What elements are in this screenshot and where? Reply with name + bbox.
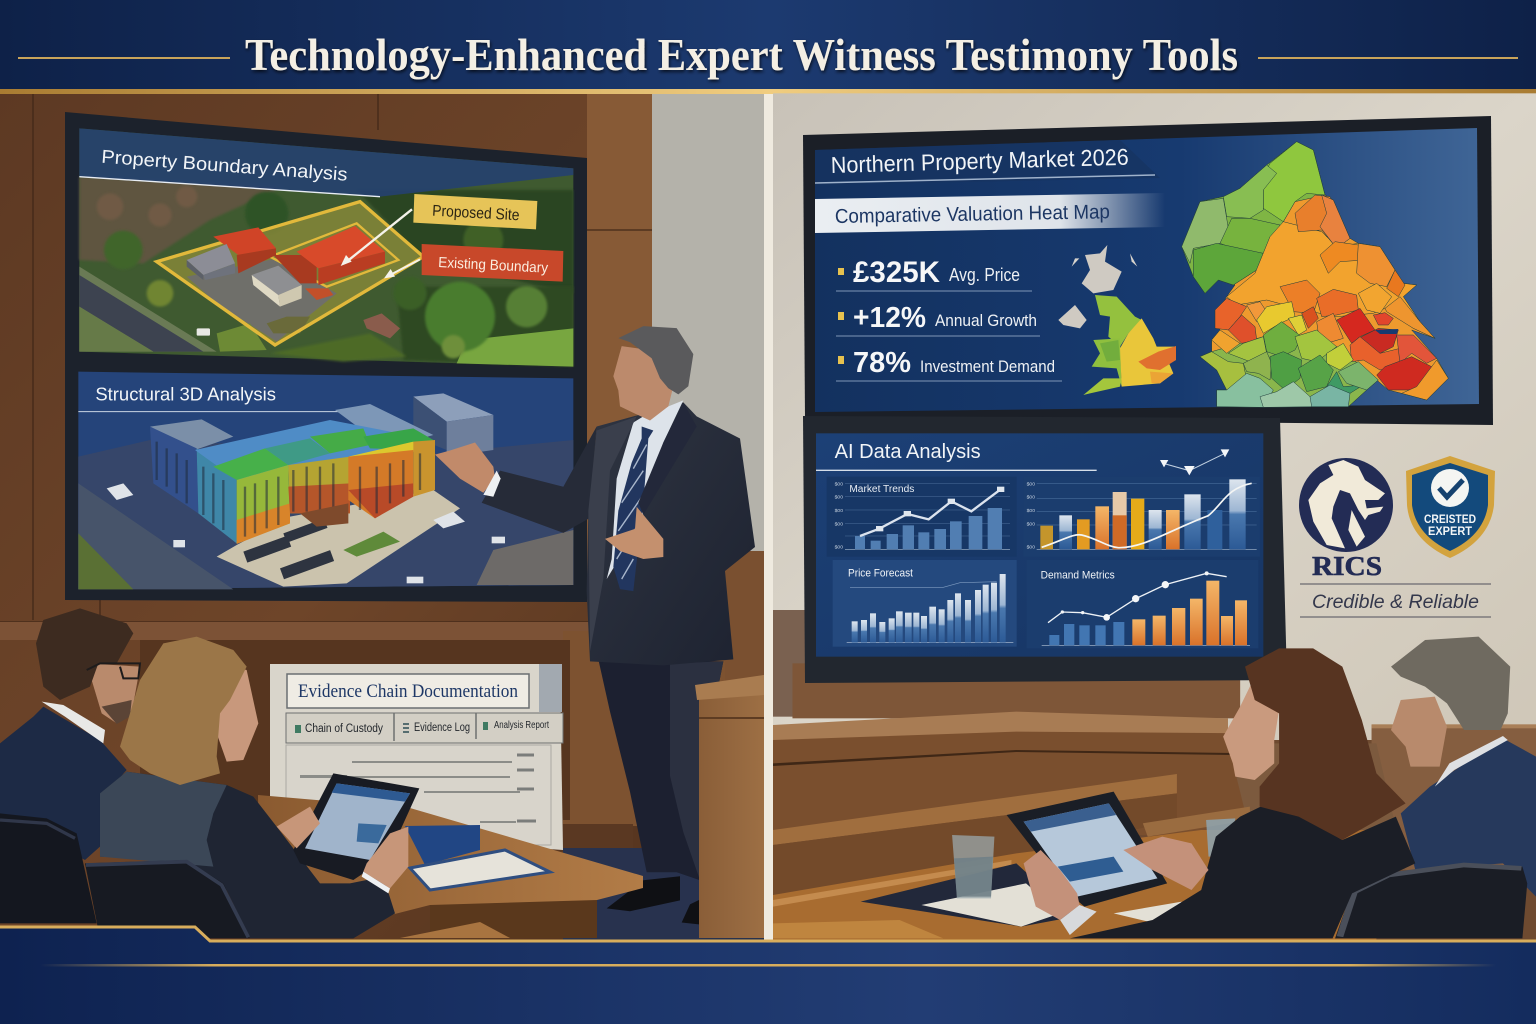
panel: right courtroom scene xyxy=(773,93,1536,940)
stat: investment demand: 78% xyxy=(853,347,911,379)
evidence chain documentation panel: Evidence Chain Documentation xyxy=(298,681,518,702)
seated man left xyxy=(0,608,140,860)
chart: market trends: $00 xyxy=(835,495,843,501)
callout: proposed site xyxy=(341,194,537,266)
pointing hand xyxy=(435,443,495,493)
chairs left xyxy=(0,813,97,923)
chair right xyxy=(1335,863,1527,938)
tabs: Analysis Report xyxy=(494,720,549,731)
chart: price forecast xyxy=(833,560,1017,647)
stat: average price xyxy=(836,256,1032,291)
rics logo xyxy=(1299,458,1393,581)
papers xyxy=(921,883,1060,927)
stat: average price: Avg. Price xyxy=(949,265,1020,285)
evidence chain documentation panel xyxy=(270,664,563,850)
chart: demand metrics xyxy=(1027,560,1258,648)
seated man right xyxy=(1391,637,1536,897)
screen: property boundary analysis: Property Boundary Analysis xyxy=(101,146,348,185)
banner: Comparative Valuation Heat Map xyxy=(835,201,1110,228)
seated woman left xyxy=(85,637,395,938)
stat: annual growth: Annual Growth xyxy=(935,311,1037,330)
rics logo: RICS xyxy=(1312,551,1382,581)
tie xyxy=(613,426,653,591)
credited expert shield xyxy=(1406,456,1495,558)
pointing arm xyxy=(482,426,597,533)
building far block xyxy=(413,393,493,422)
second glass xyxy=(1206,818,1235,857)
tabs: Evidence Log xyxy=(414,722,470,734)
chart: price forecast: Price Forecast xyxy=(848,568,913,580)
chart: mixed bars: $00 xyxy=(1027,521,1035,527)
credible and reliable caption xyxy=(1300,584,1491,617)
panel: left display wall xyxy=(65,112,587,602)
credited expert shield: EXPERT xyxy=(1428,526,1472,538)
chart: demand metrics: Demand Metrics xyxy=(1041,570,1115,582)
stat: annual growth: +12% xyxy=(853,302,926,334)
chart: market trends: Market Trends xyxy=(849,484,914,495)
callout: existing boundary xyxy=(384,244,563,282)
title: Technology-Enhanced Expert Witness Testimony Tools xyxy=(245,29,1238,80)
presenter xyxy=(435,326,755,924)
raised hand xyxy=(605,507,663,559)
main market screen xyxy=(803,116,1493,425)
right desk items, glass and people xyxy=(861,637,1536,938)
footer banner xyxy=(0,927,1536,1024)
left desk xyxy=(258,795,643,938)
divider xyxy=(764,94,773,940)
credible and reliable caption: Credible & Reliable xyxy=(1312,592,1479,613)
ai data analysis screen: AI Data Analysis xyxy=(835,441,981,463)
chart: market trends: $00 xyxy=(835,481,843,487)
title band xyxy=(79,128,573,197)
stat: investment demand: Investment Demand xyxy=(920,357,1055,376)
chart: mixed bars: $00 xyxy=(1027,508,1035,514)
jacket xyxy=(587,402,755,665)
shirt xyxy=(607,400,683,579)
jacket xyxy=(100,772,395,938)
chart: market trends xyxy=(827,477,1017,557)
second chair xyxy=(85,860,250,938)
stat: annual growth xyxy=(836,302,1040,336)
water glass xyxy=(952,835,994,898)
stat: investment demand xyxy=(836,347,1062,381)
seated woman right xyxy=(1070,648,1415,938)
ai data analysis screen xyxy=(803,416,1287,683)
chart: mixed bars xyxy=(1023,449,1260,557)
chart: market trends: $00 xyxy=(835,508,843,514)
desk mat xyxy=(861,863,1075,927)
credited expert shield: CREISTED xyxy=(1424,514,1476,526)
panel: left courtroom scene xyxy=(0,94,764,940)
callout: proposed site: Proposed Site xyxy=(432,203,520,224)
map: uk overview xyxy=(1058,245,1176,395)
callout: existing boundary: Existing Boundary xyxy=(438,255,549,277)
chart: mixed bars: $00 xyxy=(1027,481,1035,487)
hair xyxy=(120,637,247,785)
chart: mixed bars: $00 xyxy=(1027,545,1035,551)
left tablet xyxy=(277,773,419,893)
right tablet xyxy=(1007,792,1209,935)
shoes xyxy=(607,876,680,911)
main market screen: Northern Property Market 2026 xyxy=(830,144,1129,178)
screen heading xyxy=(815,140,1160,185)
building blue wing xyxy=(150,419,233,450)
banner xyxy=(815,193,1165,233)
tabs xyxy=(286,713,563,743)
chart: market trends: $00 xyxy=(835,545,843,551)
tabs: Chain of Custody xyxy=(305,723,383,735)
chart: mixed bars: $00 xyxy=(1027,495,1035,501)
screen: property boundary analysis xyxy=(79,128,573,367)
building heat facade xyxy=(237,465,290,543)
trousers xyxy=(598,659,723,880)
screen: structural 3d analysis: Structural 3D Analysis xyxy=(95,384,276,405)
podium xyxy=(695,675,764,938)
chart: market trends: $00 xyxy=(835,521,843,527)
header banner xyxy=(0,0,1536,94)
stat: average price: £325K xyxy=(853,256,940,289)
map: northern england heat map xyxy=(1182,142,1448,407)
screen: structural 3d analysis xyxy=(78,372,573,589)
face xyxy=(217,667,258,762)
head xyxy=(613,346,677,420)
